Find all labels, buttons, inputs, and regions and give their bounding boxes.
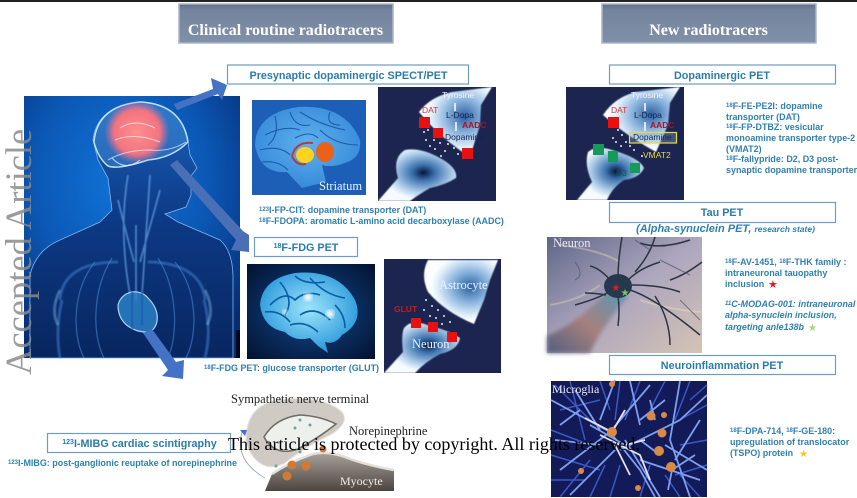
text: dopaminergic tracers: synaptic dopamine transporter [726, 165, 857, 175]
caption: presynaptic tracers: 18 [259, 218, 266, 224]
text: tau tracers: 11 [725, 301, 732, 307]
box: dopaminergic PET [610, 65, 836, 84]
text: dopaminergic tracers: monoamine transporter type-2 [726, 133, 855, 143]
diagram: dopaminergic synapse: D3 [616, 168, 627, 178]
diagram: presynaptic synapse: Dopamine [445, 132, 484, 142]
box: neuroinflammation PET [610, 356, 836, 374]
box: MIBG [48, 434, 230, 452]
text: dopaminergic tracers: F-fallypride: D2, D3 post- [733, 154, 838, 164]
caption: FDG: 18 [204, 365, 211, 371]
diagram: dopaminergic synapse: AADC [650, 120, 675, 130]
diagram: astrocyte and neuron synapse: GLUT [394, 304, 418, 314]
image: neuron [547, 236, 702, 353]
image: striatum brain: Striatum [319, 179, 362, 193]
diagram: astrocyte and neuron synapse: Neuron [412, 337, 450, 351]
box: Tau PET: Tau PET [701, 207, 744, 219]
text: dopaminergic tracers [726, 101, 857, 175]
text: tau tracers: inclusion [725, 279, 764, 289]
text: tau tracers: 18 [779, 259, 787, 265]
caption: MIBG: 123 [8, 460, 19, 466]
illustration: sympathetic terminal and myocyte: Myocyte [340, 474, 383, 488]
image: neuron: ★ [612, 283, 621, 294]
heading: new radiotracers: New radiotracers [649, 22, 768, 39]
text: tau tracers: F-AV-1451, [732, 257, 779, 267]
image: neuron: Neuron [553, 236, 591, 250]
diagram: dopaminergic synapse: DAT [611, 105, 627, 115]
text: dopaminergic tracers: 18 [726, 124, 733, 130]
text: neuroinflammation tracers: 18 [730, 428, 737, 434]
text: tau tracers: ★ [768, 278, 778, 291]
text: tau tracers: alpha-synuclein inclusion, [725, 310, 837, 320]
diagram: dopaminergic synapse: Dopamine [633, 132, 672, 142]
diagram: presynaptic synapse: L-Dopa [446, 110, 474, 120]
text: dopaminergic tracers: 18 [726, 156, 733, 162]
caption: presynaptic tracers: 123 [259, 207, 270, 213]
heading: clinical routine radiotracers: Clinical routine radiotracers [188, 22, 383, 39]
caption: presynaptic tracers: I-FP-CIT: dopamine transporter (DAT) [269, 205, 426, 215]
caption: presynaptic tracers: F-FDOPA: aromatic L-amino acid decarboxylase (AADC) [266, 216, 504, 226]
box: dopaminergic PET: Dopaminergic PET [674, 70, 770, 82]
image: striatum brain [252, 100, 366, 195]
text: dopaminergic tracers: (VMAT2) [726, 144, 762, 154]
box: FDG PET: F-FDG PET [281, 242, 339, 254]
box: FDG PET: 18 [274, 243, 282, 250]
text: dopaminergic tracers: F-FE-PE2I: dopamine [733, 101, 823, 111]
image: microglia: Microglia [552, 382, 600, 396]
image: glowing brain [247, 264, 375, 359]
box: Tau PET [610, 202, 836, 222]
diagram: dopaminergic synapse: L-Dopa [634, 110, 662, 120]
box: MIBG: 123 [62, 439, 74, 446]
diagram: dopaminergic synapse [566, 87, 684, 200]
heading: new radiotracers [602, 4, 816, 43]
text: tau tracers: ★ [808, 323, 817, 334]
subtitle: alpha-synuclein: (Alpha-synuclein PET, research state) [636, 223, 815, 235]
diagram: astrocyte and neuron synapse: Astrocyte [439, 278, 488, 292]
box: neuroinflammation PET: Neuroinflammation PET [661, 360, 784, 372]
illustration: sympathetic terminal and myocyte: Norepinephrine [349, 424, 428, 438]
image: neuron: ★ [621, 288, 630, 299]
box: presynaptic dopaminergic [228, 65, 468, 84]
text: tau tracers: 18 [725, 259, 732, 265]
diagram: astrocyte and neuron synapse [384, 259, 501, 373]
diagram: dopaminergic synapse: VMAT2 [643, 150, 671, 160]
text: neuroinflammation tracers: ★ [799, 449, 808, 460]
top rule [0, 0, 857, 2]
watermark: copyright notice: This article is protected by copyright. All rights reserved. [228, 434, 640, 454]
text: tau tracers: targeting anle138b [725, 322, 805, 332]
caption: FDG: F-FDG PET: glucose transporter (GLUT) [211, 363, 379, 373]
text: tau tracers: C-MODAG-001: intraneuronal [731, 299, 856, 309]
text: tau tracers [725, 257, 856, 334]
text: neuroinflammation tracers: (TSPO) protein [730, 448, 793, 458]
arrow: brain to FDG box [170, 160, 249, 252]
illustration: human body with brain and heart [24, 96, 240, 358]
box: presynaptic dopaminergic: Presynaptic dopaminergic SPECT/PET [250, 70, 448, 82]
text: dopaminergic tracers: 18 [726, 103, 733, 109]
text: neuroinflammation tracers: upregulation of translocator [730, 437, 850, 447]
diagram: presynaptic synapse: Tyrosine [442, 90, 474, 100]
diagram: presynaptic synapse: DAT [422, 105, 438, 115]
text: tau tracers: F-THK family : [786, 257, 847, 267]
caption: presynaptic tracers [259, 205, 504, 226]
text: neuroinflammation tracers: 18 [786, 428, 794, 434]
text: dopaminergic tracers: transporter (DAT) [726, 112, 800, 122]
arrow: brain to presynaptic box [174, 78, 227, 110]
text: neuroinflammation tracers: F-GE-180: [793, 426, 835, 436]
caption: MIBG: I-MIBG: post-ganglionic reuptake of norepinephrine [18, 458, 237, 468]
text: dopaminergic tracers: F-FP-DTBZ: vesicular [733, 122, 824, 132]
image: microglia [551, 380, 707, 497]
diagram: presynaptic synapse: AADC [462, 120, 487, 130]
heading: clinical routine radiotracers [179, 4, 393, 43]
arrow: heart to MIBG [143, 329, 184, 379]
illustration: sympathetic terminal and myocyte [231, 392, 428, 491]
illustration: sympathetic terminal and myocyte: Sympathetic nerve terminal [231, 392, 370, 406]
box: MIBG: I-MIBG cardiac scintigraphy [74, 438, 217, 450]
box: FDG PET [254, 238, 358, 256]
text: tau tracers: intraneuronal tauopathy [725, 268, 827, 278]
diagram: dopaminergic synapse: Tyrosine [631, 90, 663, 100]
diagram: presynaptic synapse [378, 87, 496, 201]
text: neuroinflammation tracers [730, 426, 850, 460]
text: neuroinflammation tracers: F-DPA-714, [737, 426, 786, 436]
